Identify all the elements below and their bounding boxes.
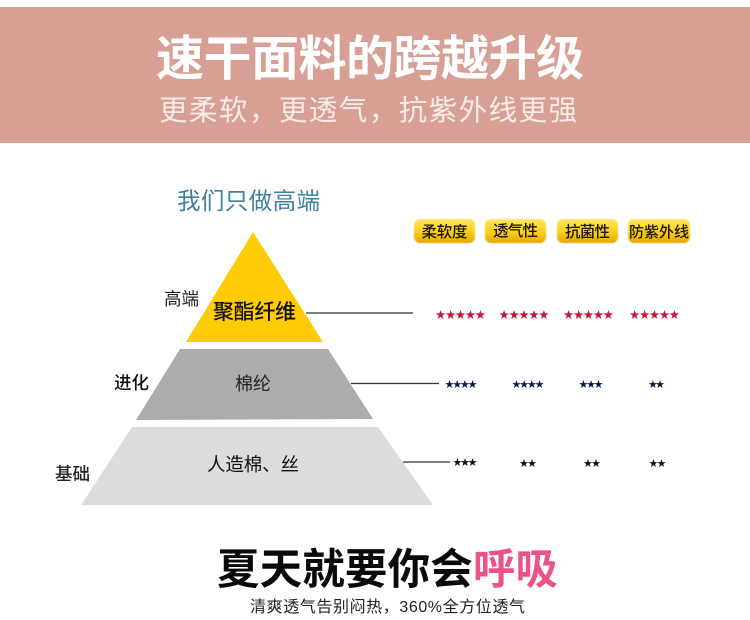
tier: rayon and silk (81, 427, 433, 505)
ratings: rayon and silk (452, 456, 667, 470)
ratings: polyester: ★★★★★ (498, 307, 550, 322)
header banner (0, 7, 750, 143)
tier: polyester: 聚酯纤维 (213, 301, 296, 324)
subtitle: 更柔软，更透气，抗紫外线更强 (159, 95, 577, 127)
ratings: polyester (435, 307, 680, 322)
badge: antibacterial: 抗菌性 (565, 222, 610, 241)
ratings: rayon and silk: ★★ (583, 457, 601, 470)
pyramid heading: 我们只做高端 (177, 188, 320, 214)
pyramid chart (81, 232, 433, 505)
level label: evolved: 进化 (114, 373, 149, 393)
ratings: rayon and silk: ★★ (648, 457, 667, 470)
tier: cotton and nylon (136, 349, 373, 420)
ratings: cotton and nylon: ★★★ (578, 378, 604, 391)
badge: UV protection (628, 219, 690, 243)
footer slogan: 夏天就要你会呼吸 (217, 547, 558, 594)
footer subtext: 清爽透气告别闷热，360%全方位透气 (250, 598, 525, 616)
leader lines (306, 313, 450, 462)
ratings: cotton and nylon: ★★ (648, 378, 665, 391)
level label: high end: 高端 (164, 289, 199, 309)
ratings: polyester: ★★★★★ (629, 307, 680, 322)
badge: softness (414, 219, 475, 243)
badge: breathability (485, 219, 546, 243)
ratings: cotton and nylon: ★★★★ (512, 378, 545, 391)
badge: breathability: 透气性 (493, 222, 538, 240)
ratings: polyester: ★★★★★ (563, 307, 614, 322)
badge: antibacterial (557, 219, 618, 243)
tier: rayon and silk: 人造棉、丝 (207, 454, 299, 475)
tier: polyester (186, 232, 323, 342)
badge: UV protection: 防紫外线 (629, 224, 689, 241)
level label: basic: 基础 (55, 464, 90, 484)
tier: cotton and nylon: 棉纶 (235, 374, 271, 394)
ratings: cotton and nylon (444, 378, 665, 391)
ratings: cotton and nylon: ★★★★ (444, 378, 478, 391)
ratings: rayon and silk: ★★★ (452, 456, 478, 469)
title: 速干面料的跨越升级 (156, 33, 584, 86)
ratings: polyester: ★★★★★ (435, 307, 486, 322)
ratings: rayon and silk: ★★ (519, 457, 537, 470)
badge: softness: 柔软度 (422, 223, 468, 241)
